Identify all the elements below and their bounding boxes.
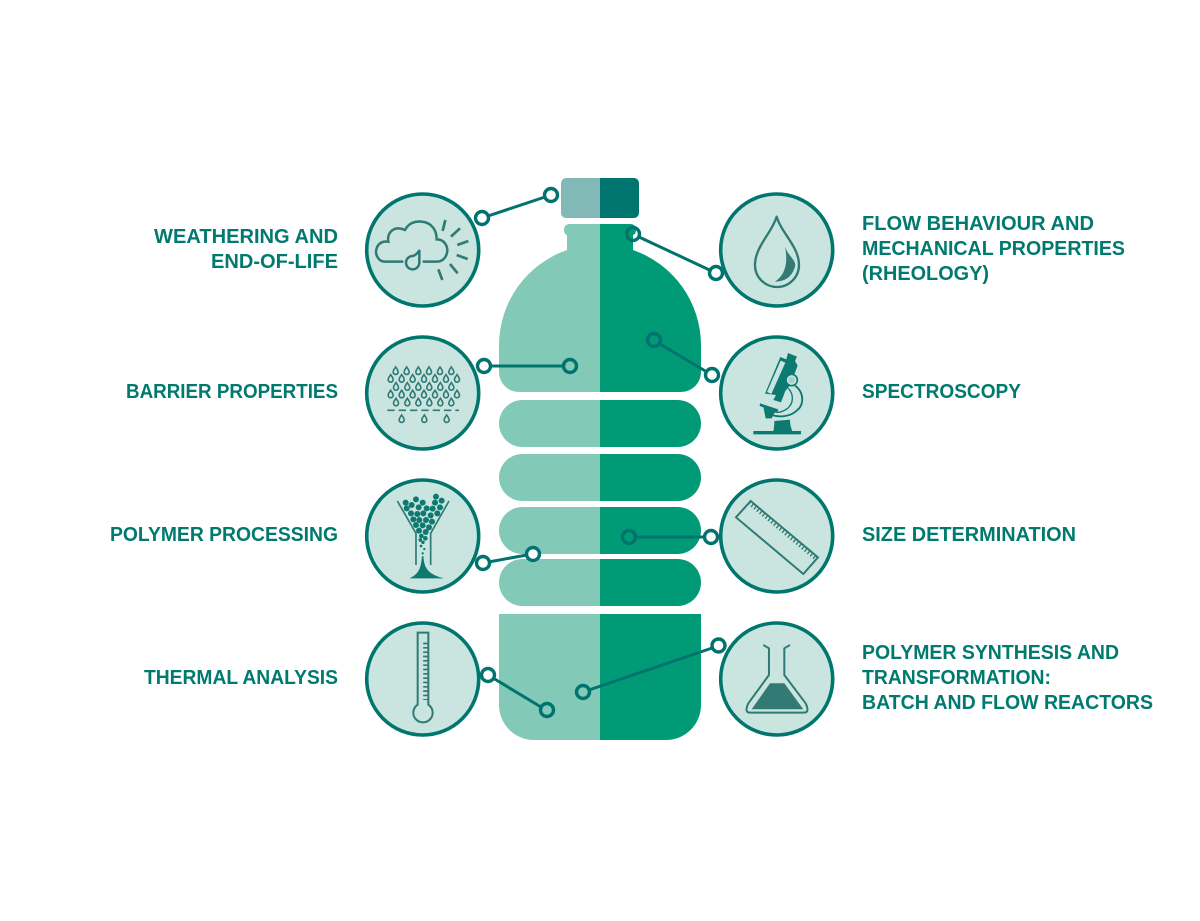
label: flow behaviour and rheology: MECHANICAL PROPERTIES	[862, 238, 1125, 260]
bottle cap	[561, 178, 639, 218]
icon: polymer processing funnel	[367, 480, 479, 592]
connector: processing	[476, 548, 540, 570]
connector: thermal	[482, 668, 554, 716]
icon: weathering cloud	[367, 194, 479, 306]
bottle base	[499, 614, 701, 740]
connector: spectroscopy	[648, 334, 718, 382]
label: weathering and end-of-life: WEATHERING AND	[154, 226, 338, 248]
connector: weathering	[476, 188, 558, 224]
icon: barrier droplets	[367, 337, 479, 449]
label: flow behaviour and rheology: FLOW BEHAVIOUR AND	[862, 213, 1094, 235]
bottle	[499, 178, 701, 740]
icon: ruler	[721, 480, 833, 592]
label: flow behaviour and rheology: (RHEOLOGY)	[862, 263, 989, 285]
connector: rheology	[626, 228, 722, 280]
label: polymer synthesis	[862, 642, 1153, 714]
label: polymer synthesis: POLYMER SYNTHESIS AND	[862, 642, 1119, 664]
label: barrier properties: BARRIER PROPERTIES	[126, 381, 338, 403]
label: flow behaviour and rheology	[862, 213, 1125, 285]
label: thermal analysis: THERMAL ANALYSIS	[144, 667, 338, 689]
icon: microscope	[721, 337, 833, 449]
icon: flask	[721, 623, 833, 735]
label: weathering and end-of-life	[154, 226, 338, 273]
connector: synthesis	[576, 639, 725, 698]
connector: barrier	[478, 360, 576, 372]
connector: size	[622, 530, 718, 544]
label: size determination: SIZE DETERMINATION	[862, 524, 1076, 546]
bottle ribs	[499, 400, 701, 606]
icon: rheology drop	[721, 194, 833, 306]
label: weathering and end-of-life: END-OF-LIFE	[211, 251, 338, 273]
label: polymer synthesis: TRANSFORMATION:	[862, 667, 1051, 689]
icon: thermometer	[367, 623, 479, 735]
bottle shoulder	[499, 224, 701, 392]
label: spectroscopy: SPECTROSCOPY	[862, 381, 1022, 403]
label: polymer synthesis: BATCH AND FLOW REACTORS	[862, 692, 1153, 714]
label: polymer processing: POLYMER PROCESSING	[110, 524, 338, 546]
